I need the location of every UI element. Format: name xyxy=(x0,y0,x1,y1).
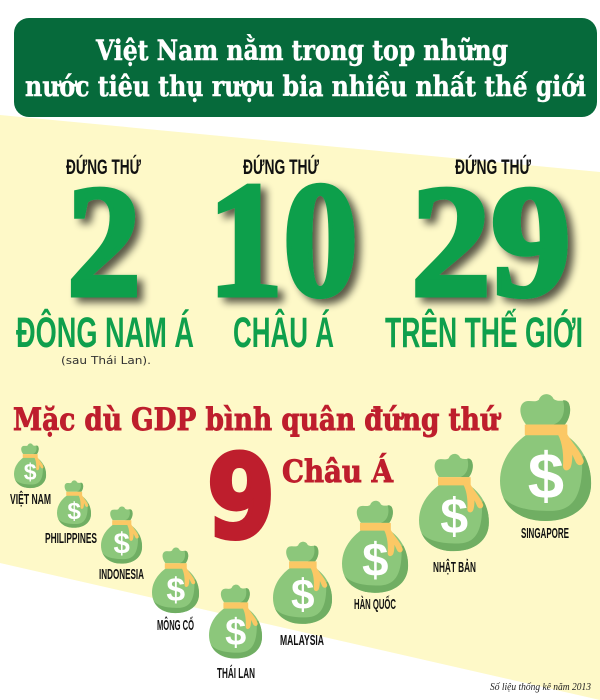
money bag: Malaysia: $ xyxy=(291,571,314,618)
stat: rank 10 in Asia: CHÂU Á xyxy=(233,308,334,357)
stat: rank 2 in Southeast Asia: ĐÔNG NAM Á xyxy=(16,308,194,357)
title banner xyxy=(14,18,597,117)
stat: rank 10 in Asia: ĐỨNG THỨ xyxy=(243,155,319,179)
money bag: Thái Lan: $ xyxy=(225,612,246,654)
stat: rank 2 in Southeast Asia: ĐỨNG THỨ xyxy=(66,155,141,179)
money bag: Việt Nam xyxy=(10,443,51,508)
money bag: Singapore: $ xyxy=(528,439,564,512)
money bag: Việt Nam: $ xyxy=(24,459,37,485)
money bag: Nhật Bản: $ xyxy=(440,488,468,544)
money bag: Malaysia: MALAYSIA xyxy=(280,632,324,649)
money bag: Malaysia xyxy=(273,542,334,649)
money bag: Indonesia: $ xyxy=(113,527,130,560)
source note: Số liệu thống kê năm 2013 xyxy=(490,682,591,693)
money bag: Indonesia: INDONESIA xyxy=(99,566,144,583)
stat: rank 29 in the world: ĐỨNG THỨ xyxy=(455,155,531,179)
GDP heading xyxy=(13,402,501,564)
GDP heading: Mặc dù GDP bình quân đứng thứ xyxy=(13,402,501,438)
title banner: Việt Nam nằm trong top những xyxy=(95,34,508,67)
GDP heading: 9 xyxy=(207,431,275,564)
stat: rank 2 in Southeast Asia: (sau Thái Lan). xyxy=(61,354,151,367)
money bag: Nhật Bản: NHẬT BẢN xyxy=(433,558,476,576)
money bag: Nhật Bản xyxy=(419,454,491,576)
money bag: Mông Cổ: MÔNG CỔ xyxy=(157,616,194,634)
money bag: Philippines: $ xyxy=(67,498,81,525)
stat: rank 2 in Southeast Asia xyxy=(16,152,194,367)
GDP heading: Châu Á xyxy=(282,452,394,490)
stat: rank 2 in Southeast Asia: 2 xyxy=(67,152,141,330)
money bag: Indonesia xyxy=(99,506,144,583)
money bag: Thái Lan: THÁI LAN xyxy=(217,665,255,682)
money bag: Hàn Quốc: $ xyxy=(362,534,388,587)
money bag: Hàn Quốc: HÀN QUỐC xyxy=(354,595,396,613)
stat: rank 29 in the world: 29 xyxy=(411,152,571,330)
money bag: Singapore xyxy=(500,394,594,542)
money bag: Mông Cổ: $ xyxy=(166,571,185,609)
money bag: Việt Nam: VIỆT NAM xyxy=(10,490,51,508)
money bag: Philippines: PHILIPPINES xyxy=(45,530,97,547)
money bag: Hàn Quốc xyxy=(342,501,410,613)
money bag: Thái Lan xyxy=(209,585,264,682)
money bag: Mông Cổ xyxy=(152,548,200,634)
stat: rank 10 in Asia: 10 xyxy=(208,148,358,331)
money bag: Philippines xyxy=(45,480,97,547)
